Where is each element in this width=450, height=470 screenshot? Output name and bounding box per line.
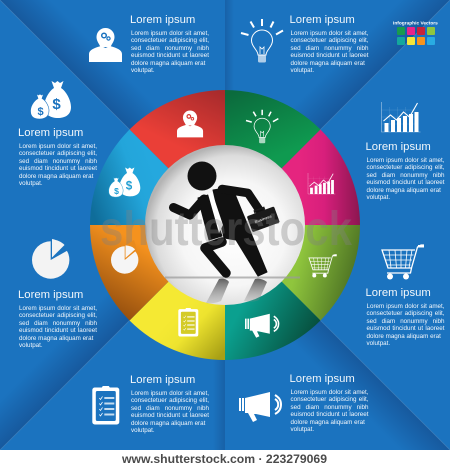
text block: top right: consectetuer adipiscing elit, xyxy=(290,37,368,44)
text block: upper right: Lorem ipsum dolor sit amet, xyxy=(366,156,444,164)
text block: upper left: consectetuer adipiscing elit, xyxy=(19,150,97,157)
text block: top right: dolore magna aliquam erat xyxy=(290,60,365,67)
text block: upper right: sed diam nonummy nibh xyxy=(366,172,444,179)
segment: magenta xyxy=(225,130,360,225)
segment: cyan xyxy=(90,130,225,225)
watermark: shutterstock xyxy=(100,203,352,256)
ring icon: person xyxy=(177,110,203,137)
text block: bottom right: volutpat. xyxy=(290,426,314,433)
text block: bottom left xyxy=(130,374,209,434)
legend swatches xyxy=(397,27,435,45)
segment: red xyxy=(130,90,225,225)
text block: top left: volutpat. xyxy=(131,67,155,74)
ring icon: clipboard xyxy=(178,308,198,336)
text block: bottom left: Lorem ipsum xyxy=(130,374,195,386)
text block: top left: euismod tincidunt ut laoreet xyxy=(131,52,209,59)
legend: infographic vectors xyxy=(393,20,438,45)
text block: lower right: volutpat. xyxy=(366,340,390,347)
briefcase: Business xyxy=(254,213,273,224)
text block: upper left: Lorem ipsum dolor sit amet, xyxy=(19,142,97,150)
icon: shopping cart xyxy=(382,245,424,280)
text block: top left: dolore magna aliquam erat xyxy=(131,60,205,67)
text block: lower right: consectetuer adipiscing elit, xyxy=(366,310,444,317)
segment: lime xyxy=(225,225,360,320)
ring chart xyxy=(90,90,360,360)
text block: bottom left: Lorem ipsum dolor sit amet, xyxy=(131,390,209,396)
centre sphere xyxy=(145,145,305,305)
text block: bottom left: volutpat. xyxy=(131,427,155,434)
text block: bottom right: dolore magna aliquam erat xyxy=(290,419,365,426)
icon: light bulb xyxy=(241,19,283,62)
text block: lower left: Lorem ipsum dolor sit amet, xyxy=(19,304,97,312)
text block: lower left xyxy=(18,289,97,349)
text block: bottom right: sed diam nonummy nibh xyxy=(290,404,368,411)
ring icon: money bags xyxy=(109,167,140,197)
footer credit: www.shutterstock.com · 223279069 xyxy=(121,452,327,466)
text block: lower right: dolore magna aliquam erat xyxy=(366,333,441,340)
text block: lower right xyxy=(366,287,444,347)
text block: bottom left: euismod tincidunt ut laoreet xyxy=(131,412,209,419)
text block: bottom right: Lorem ipsum xyxy=(290,373,355,385)
text block: top right: volutpat. xyxy=(290,67,314,74)
text block: lower left: euismod tincidunt ut laoreet xyxy=(19,327,97,334)
text block: lower left: dolore magna aliquam erat xyxy=(19,335,93,342)
icon: person xyxy=(89,28,122,62)
icon: clipboard xyxy=(92,386,119,424)
text block: top right: sed diam nonummy nibh xyxy=(290,45,368,52)
text block: top left: consectetuer adipiscing elit, xyxy=(131,37,209,44)
text block: bottom right: consectetuer adipiscing elit, xyxy=(290,396,368,403)
running businessman figure xyxy=(174,162,280,276)
text block: bottom left: sed diam nonummy nibh xyxy=(131,405,209,412)
text block: top right: euismod tincidunt ut laoreet xyxy=(290,52,368,59)
text block: lower left: Lorem ipsum xyxy=(18,289,83,301)
text block: upper right: consectetuer adipiscing elit, xyxy=(366,164,444,171)
necktie xyxy=(208,192,223,233)
icon: money bags xyxy=(30,81,71,119)
icon: pie chart xyxy=(32,233,72,279)
text block: top left: Lorem ipsum xyxy=(130,14,195,26)
text block: top left: sed diam nonummy nibh xyxy=(131,45,209,52)
segment: teal xyxy=(225,225,320,360)
text block: upper left xyxy=(18,127,97,187)
text block: bottom left: dolore magna aliquam erat xyxy=(131,420,205,427)
text block: top right xyxy=(290,14,368,74)
text block: lower left: consectetuer adipiscing elit, xyxy=(19,312,97,319)
text block: lower right: euismod tincidunt ut laoreet xyxy=(366,325,444,332)
text block: lower left: sed diam nonummy nibh xyxy=(19,320,97,327)
text block: upper right: euismod tincidunt ut laoreet xyxy=(366,179,444,186)
text block: upper left: dolore magna aliquam erat xyxy=(19,173,93,180)
text block: upper left: volutpat. xyxy=(19,180,43,187)
text block: bottom right: euismod tincidunt ut laoreet xyxy=(290,411,368,418)
segment: orange xyxy=(90,225,225,320)
ring icon: cart xyxy=(309,255,337,277)
floor line xyxy=(165,276,300,278)
ring icon: chart xyxy=(308,173,335,194)
text block: lower right: sed diam nonummy nibh xyxy=(366,318,444,325)
head xyxy=(188,162,216,190)
ring icon: pie xyxy=(111,240,138,274)
text block: top left: Lorem ipsum dolor sit amet, xyxy=(131,30,209,36)
text block: upper left: Lorem ipsum xyxy=(18,127,83,139)
text block: bottom left: consectetuer adipiscing elit, xyxy=(131,397,209,404)
body xyxy=(174,187,267,276)
text block: top right: Lorem ipsum xyxy=(290,14,355,26)
ring icon: bulb xyxy=(246,110,278,143)
text block: upper right: volutpat. xyxy=(366,194,390,201)
text block: upper right xyxy=(366,141,444,201)
text block: upper left: euismod tincidunt ut laoreet xyxy=(19,165,97,172)
text block: upper right: dolore magna aliquam erat xyxy=(366,187,441,194)
text block: top right: Lorem ipsum dolor sit amet, xyxy=(290,30,368,36)
text block: lower right: Lorem ipsum xyxy=(366,287,431,299)
text block: bottom right: Lorem ipsum dolor sit amet, xyxy=(290,388,368,396)
text block: lower left: volutpat. xyxy=(19,342,43,349)
figure reflection xyxy=(206,279,267,303)
icon: megaphone xyxy=(239,392,281,422)
legend title: Infographic Vectors xyxy=(393,20,438,26)
icon: bar chart xyxy=(382,102,420,132)
text block: top left xyxy=(130,14,209,74)
text block: upper left: sed diam nonummy nibh xyxy=(19,158,97,165)
text block: lower right: Lorem ipsum dolor sit amet, xyxy=(366,302,444,310)
text block: upper right: Lorem ipsum xyxy=(366,141,431,153)
segment: yellow xyxy=(130,225,225,360)
text block: bottom right xyxy=(290,373,368,433)
segment: dark green xyxy=(225,90,320,225)
ring icon: megaphone xyxy=(245,314,279,338)
